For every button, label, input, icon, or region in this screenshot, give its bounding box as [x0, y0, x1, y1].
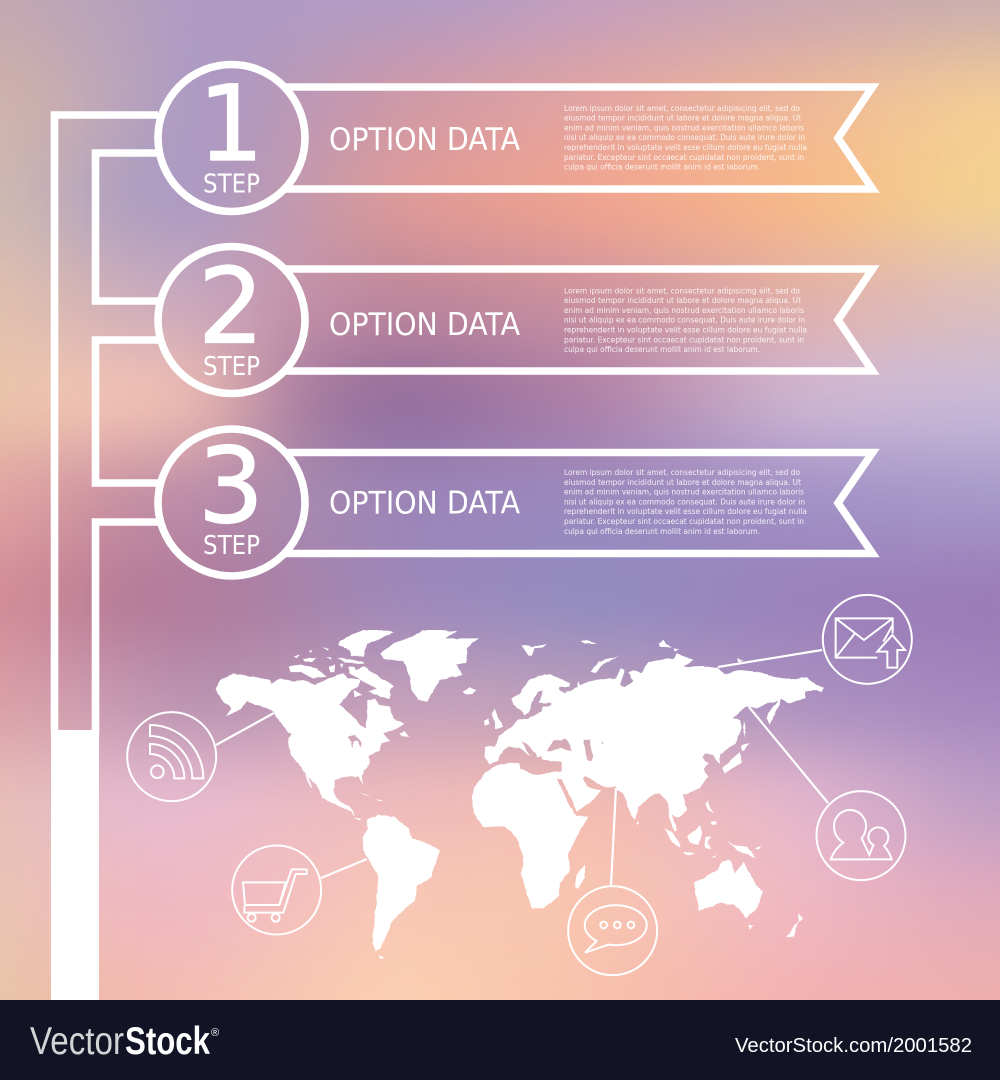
map: Asian and Arctic islands — [463, 640, 761, 858]
circle 3 — [158, 429, 305, 576]
body text 1: Lorem ipsum dolor sit amet, consectetur adipisicing elit, sed do — [564, 103, 800, 113]
icon: users — [816, 791, 905, 880]
number 2: 2 — [198, 246, 264, 368]
body text 1: nisi ut aliquip ex ea commodo consequat. Duis aute irure dolor in — [564, 132, 805, 142]
connector lines from map to icons — [216, 650, 828, 885]
body text 1: eiusmod tempor incididunt ut labore et dolore magna aliqua. Ut — [564, 113, 802, 123]
body text 1 — [564, 103, 807, 172]
option heading 1: OPTION DATA — [329, 122, 520, 158]
body text 3: nisi ut aliquip ex ea commodo consequat. Duis aute irure dolor in — [564, 496, 805, 506]
body text 1: reprehenderit in voluptate velit esse cillum dolore eu fugiat nulla — [564, 142, 807, 152]
ribbon 1 — [284, 87, 872, 189]
body text 2 — [564, 285, 807, 354]
body text 1: pariatur. Excepteur sint occaecat cupidatat non proident, sunt in — [564, 152, 804, 162]
footer logo: Vector — [30, 1020, 124, 1063]
footer logo: Stock — [125, 1020, 210, 1063]
ribbon 2 — [284, 269, 872, 371]
body text 2: eiusmod tempor incididunt ut labore et dolore magna aliqua. Ut — [564, 295, 802, 305]
body text 3 — [564, 467, 807, 536]
footer logo: ® — [211, 1027, 219, 1039]
body text 1: culpa qui officia deserunt mollit anim id est laborum. — [564, 162, 760, 172]
icon: RSS — [127, 712, 216, 801]
body text 2: enim ad minim veniam, quis nostrud exercitation ullamco laboris — [564, 305, 804, 315]
option heading 3: OPTION DATA — [329, 486, 520, 522]
body text 2: Lorem ipsum dolor sit amet, consectetur adipisicing elit, sed do — [564, 285, 800, 295]
number 1: 1 — [198, 63, 264, 185]
map: Greenland and Arctic islands — [289, 630, 478, 738]
footer bar — [0, 1000, 1000, 1080]
body text 3: reprehenderit in voluptate velit esse cillum dolore eu fugiat nulla — [564, 506, 807, 516]
option heading 2: OPTION DATA — [329, 307, 520, 343]
footer logo — [30, 1020, 219, 1063]
step label 2: STEP — [203, 352, 260, 382]
solid white pole base — [51, 730, 99, 1000]
map: Eurasia — [485, 653, 824, 832]
body text 3: enim ad minim veniam, quis nostrud exercitation ullamco laboris — [564, 487, 804, 497]
circle 2 — [158, 246, 305, 394]
ribbon 3 — [284, 452, 872, 554]
icon: chat bubble — [568, 886, 657, 975]
body text 3: Lorem ipsum dolor sit amet, consectetur adipisicing elit, sed do — [564, 467, 800, 477]
footer image id: VectorStock.com/2001582 — [735, 1035, 972, 1057]
number 3: 3 — [198, 425, 264, 547]
icon: shopping cart — [232, 845, 321, 934]
icon: mail upload — [823, 595, 912, 684]
step 1 — [158, 63, 872, 212]
body text 3: culpa qui officia deserunt mollit anim id est laborum. — [564, 526, 760, 536]
map: Africa and Madagascar — [472, 763, 588, 908]
map: Australia and New Zealand — [694, 860, 803, 937]
body text 2: culpa qui officia deserunt mollit anim id est laborum. — [564, 344, 760, 354]
body text 3: pariatur. Excepteur sint occaecat cupidatat non proident, sunt in — [564, 516, 804, 526]
step label 3: STEP — [203, 531, 260, 561]
body text 2: reprehenderit in voluptate velit esse cillum dolore eu fugiat nulla — [564, 324, 807, 334]
connector frame from pole to step circles — [54, 115, 158, 734]
map: North and South America — [217, 673, 440, 958]
body text 2: pariatur. Excepteur sint occaecat cupidatat non proident, sunt in — [564, 334, 804, 344]
circle 1 — [158, 64, 305, 212]
world map — [217, 630, 824, 958]
body text 3: eiusmod tempor incididunt ut labore et dolore magna aliqua. Ut — [564, 477, 802, 487]
step 2 — [158, 246, 872, 394]
step 3 — [158, 425, 872, 576]
step label 1: STEP — [203, 170, 260, 200]
body text 1: enim ad minim veniam, quis nostrud exercitation ullamco laboris — [564, 122, 804, 132]
body text 2: nisi ut aliquip ex ea commodo consequat. Duis aute irure dolor in — [564, 315, 805, 325]
